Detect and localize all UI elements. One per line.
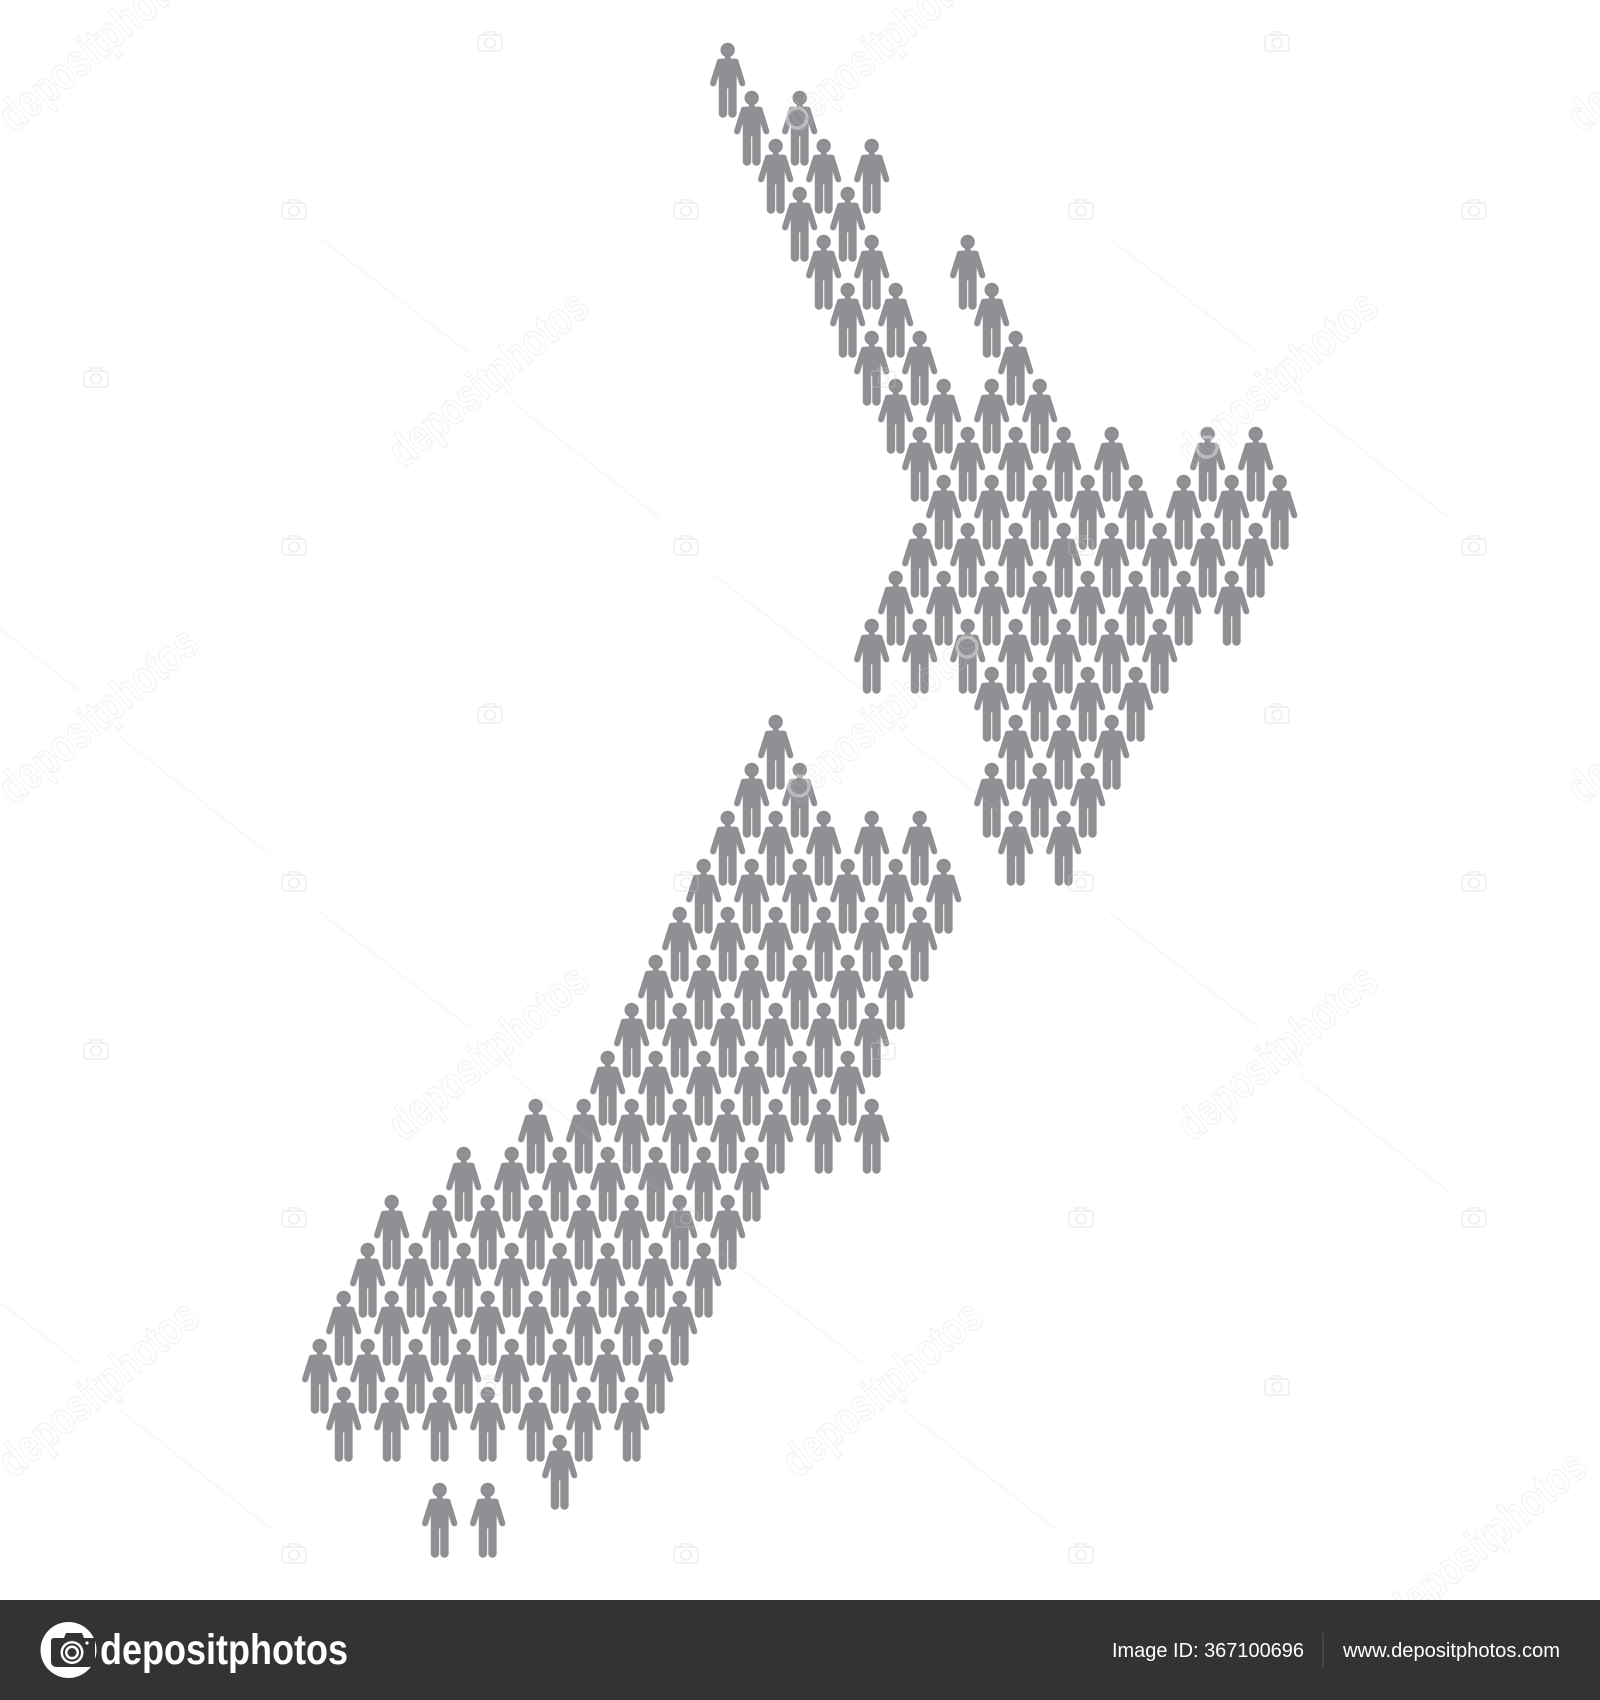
watermark overlay: depositphotos [771, 616, 992, 813]
north island people [710, 43, 1297, 885]
watermark overlay: depositphotos [377, 953, 598, 1150]
footer bar [0, 1600, 1600, 1700]
logo icon: camera in white circle [40, 1622, 96, 1678]
watermark overlay: depositphotos [1166, 953, 1387, 1150]
watermark overlay: depositphotos [771, 1289, 992, 1486]
image id: Image ID: 367100696 [1112, 1639, 1304, 1662]
website: www.depositphotos.com [1342, 1639, 1560, 1662]
watermark overlay: depositphotos [377, 279, 598, 476]
south island people [302, 715, 961, 1557]
divider [1322, 1633, 1324, 1668]
watermark overlay: depositphotos [1166, 279, 1387, 476]
logo wordmark: depositphotos [100, 1626, 348, 1674]
map: New Zealand made of people [302, 43, 1297, 1557]
